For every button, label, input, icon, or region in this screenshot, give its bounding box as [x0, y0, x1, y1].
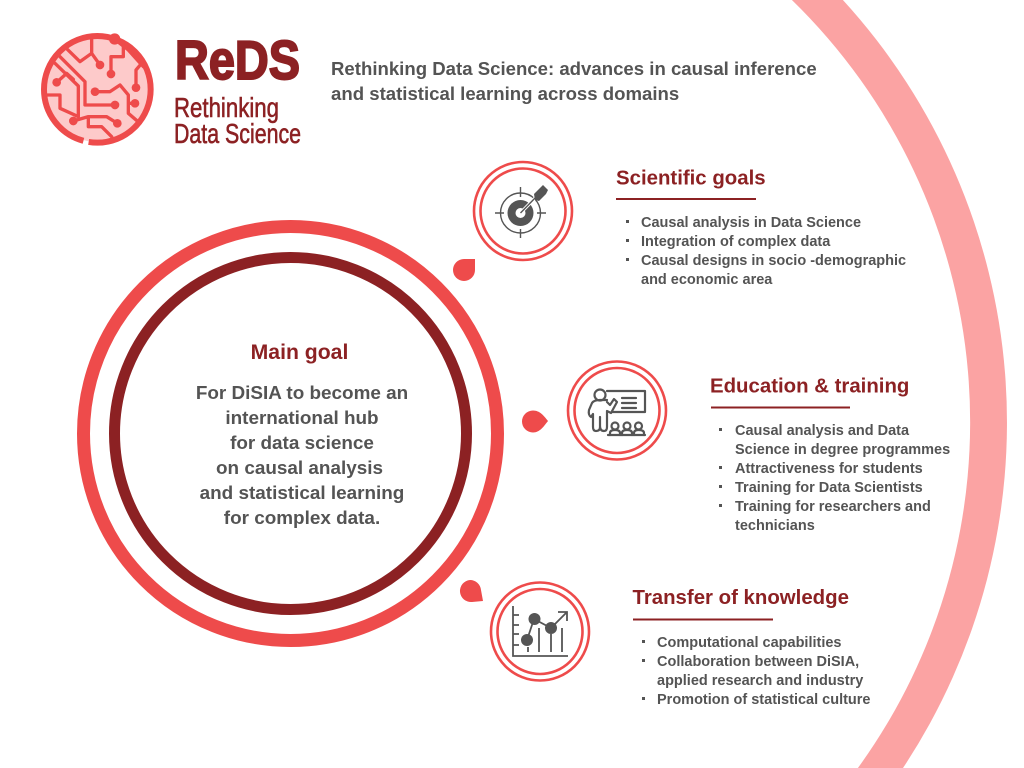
list: scientific goals [626, 215, 906, 288]
list: scientific goals: Causal analysis in Data Science [641, 215, 861, 231]
connector drop: education [522, 410, 548, 432]
main goal text: Main goal [251, 341, 348, 364]
main goal text: For DiSIA to become an [196, 383, 408, 404]
main goal text: and statistical learning [200, 483, 404, 504]
list: education and training: technicians [735, 518, 815, 534]
icon: teacher at board [568, 362, 666, 460]
list: education and training: Attractiveness for students [735, 461, 923, 477]
decorative pink arc [792, 0, 1007, 768]
main goal text: for data science [230, 433, 374, 454]
icon: line chart [491, 582, 589, 680]
title: and statistical learning across domains [331, 83, 679, 104]
title [331, 58, 817, 104]
main goal text: on causal analysis [216, 458, 383, 479]
section: education and training [710, 376, 950, 534]
list: transfer of knowledge: applied research and industry [657, 673, 863, 689]
list: education and training: Science in degree programmes [735, 442, 950, 458]
logo wordmark [174, 29, 301, 149]
list: education and training [719, 423, 950, 534]
heading: education and training: Education & training [710, 376, 909, 398]
list: education and training: Causal analysis and Data [735, 423, 910, 439]
list: transfer of knowledge: Computational capabilities [657, 635, 842, 651]
connector drop: transfer [460, 580, 483, 602]
logo wordmark: Data Science [174, 118, 301, 149]
list: transfer of knowledge [642, 635, 870, 708]
main goal text: for complex data. [224, 508, 380, 529]
list: scientific goals: Integration of complex data [641, 234, 831, 250]
section: scientific goals [616, 168, 906, 288]
logo wordmark: Rethinking [174, 92, 279, 123]
heading: scientific goals: Scientific goals [616, 168, 766, 190]
main goal rings [84, 226, 498, 640]
list: transfer of knowledge: Collaboration between DiSIA, [657, 654, 859, 670]
main goal text [196, 341, 408, 529]
list: education and training: Training for Data Scientists [735, 480, 923, 496]
title: Rethinking Data Science: advances in causal inference [331, 58, 817, 79]
logo emblem [44, 33, 151, 143]
logo wordmark: ReDS [175, 29, 300, 91]
main goal text: international hub [225, 408, 379, 429]
heading: transfer of knowledge: Transfer of knowledge [632, 587, 849, 609]
list: scientific goals: and economic area [641, 272, 773, 288]
logo [44, 29, 301, 149]
icon: target with arrow [474, 162, 572, 260]
connector drop: scientific goals [453, 259, 475, 281]
list: education and training: Training for researchers and [735, 499, 931, 515]
list: scientific goals: Causal designs in socio -demographic [641, 253, 906, 269]
section: transfer of knowledge [632, 587, 870, 708]
list: transfer of knowledge: Promotion of statistical culture [657, 692, 870, 708]
